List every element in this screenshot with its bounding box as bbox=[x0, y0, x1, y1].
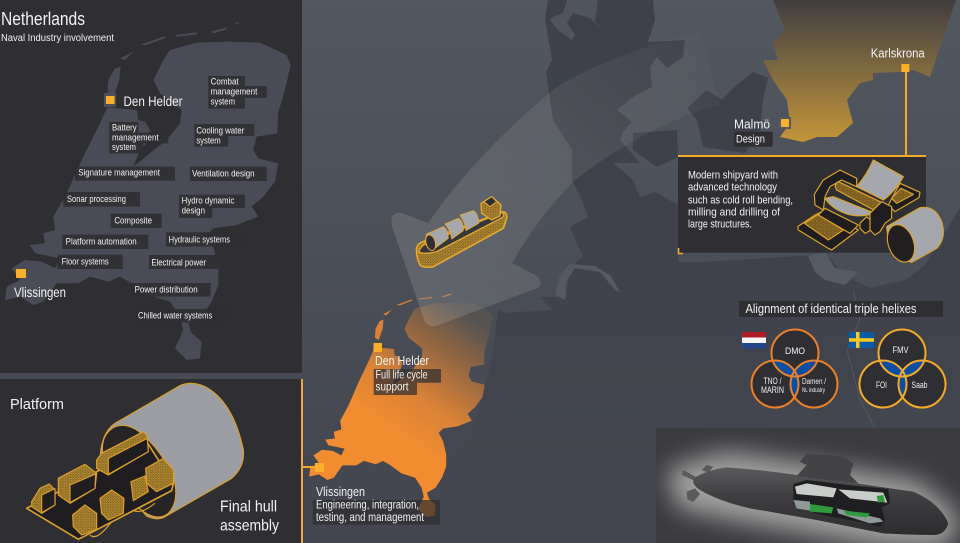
tag: Composite: Composite bbox=[114, 216, 152, 226]
tag: Composite bbox=[111, 214, 162, 228]
tag: Platform automation bbox=[62, 235, 148, 249]
tag: Battery management system: management bbox=[112, 132, 159, 142]
label: Malmo design: Design bbox=[736, 133, 765, 145]
text: shipyard description: such as cold roll bending, bbox=[688, 194, 793, 206]
label: Den Helder: Den Helder bbox=[124, 94, 183, 109]
text: shipyard description: Modern shipyard with bbox=[688, 169, 778, 181]
caption: Final hull assembly: Final hull bbox=[220, 498, 277, 516]
icon: cold roll bending machine and hull ring bbox=[798, 160, 943, 266]
interior compartments bbox=[795, 483, 887, 503]
tag: Ventilation design: Ventilation design bbox=[192, 169, 255, 179]
chart: Swedish triple helix venn diagram: FOI bbox=[876, 380, 887, 390]
tag: Hydro dynamic design: Hydro dynamic bbox=[182, 195, 235, 205]
tag: Combat management system: management bbox=[211, 86, 258, 96]
label: Karlskrona: Karlskrona bbox=[871, 45, 925, 60]
tag: Electrical power bbox=[149, 255, 218, 269]
tag: Platform automation: Platform automation bbox=[66, 236, 137, 246]
chart: Dutch triple helix venn diagram bbox=[752, 330, 838, 408]
label: Vlissingen engineering: Vlissingen bbox=[316, 484, 365, 499]
chart: Swedish triple helix venn diagram: FMV bbox=[892, 345, 908, 355]
map: Limfjord inlets bbox=[550, 0, 607, 40]
chart: Dutch triple helix venn diagram: NL industry bbox=[802, 388, 825, 394]
illustration: submarine cutaway bbox=[656, 428, 960, 543]
caption: Final hull assembly: assembly bbox=[220, 518, 279, 534]
panel: Platform final hull assembly bbox=[0, 379, 302, 543]
heading: Platform: Platform bbox=[10, 396, 64, 413]
label: Den Helder full life cycle support: support bbox=[376, 382, 409, 394]
tag: Battery management system: Battery bbox=[112, 122, 137, 132]
chart: Dutch triple helix venn diagram: DMO bbox=[785, 346, 805, 356]
tag: Battery management system: system bbox=[112, 142, 136, 152]
tag: Chilled water systems: Chilled water systems bbox=[138, 311, 213, 321]
map: border line east bbox=[847, 290, 875, 428]
submarine hull bbox=[693, 467, 948, 535]
tag: Floor systems bbox=[57, 255, 123, 269]
cutaway interior bbox=[793, 480, 890, 527]
icon: hull section with platform modules bbox=[27, 383, 243, 539]
tag: Combat management system: system bbox=[211, 97, 235, 107]
tag: Cooling water system bbox=[194, 124, 254, 147]
chart: Swedish triple helix venn diagram: Saab bbox=[912, 380, 928, 390]
map: Funen island bbox=[633, 130, 678, 167]
label: Den Helder full life cycle support: Den Helder bbox=[375, 353, 430, 368]
tag: Floor systems: Floor systems bbox=[62, 257, 109, 267]
tag: Sonar processing bbox=[63, 192, 140, 207]
label: Vlissingen engineering: testing, and management bbox=[316, 512, 425, 524]
tag: Battery management system bbox=[109, 122, 168, 153]
label: Malmo design bbox=[734, 116, 773, 147]
submarine fins bbox=[682, 465, 713, 502]
tag: Ventilation design bbox=[190, 167, 267, 181]
tag: Electrical power: Electrical power bbox=[151, 257, 206, 267]
tag: Combat management system: Combat bbox=[211, 76, 239, 86]
tag: Sonar processing: Sonar processing bbox=[67, 194, 126, 204]
marker: Den Helder bbox=[104, 93, 116, 107]
label: Den Helder full life cycle support bbox=[374, 353, 441, 395]
industry tags bbox=[57, 76, 267, 323]
map: Germany, Jutland and Poland land bbox=[440, 0, 960, 543]
text: shipyard description: large structures. bbox=[688, 219, 752, 231]
text: shipyard description: milling and drilling of bbox=[688, 207, 780, 219]
map: Netherlands grey silhouette bbox=[5, 22, 291, 360]
heading: Netherlands: Netherlands bbox=[1, 9, 85, 29]
tag: Hydro dynamic design: design bbox=[182, 205, 205, 215]
label: Den Helder full life cycle support: Full life cycle bbox=[376, 369, 428, 381]
tag: Signature management: Signature management bbox=[78, 168, 160, 178]
tag: Power distribution: Power distribution bbox=[135, 284, 198, 294]
tag: Chilled water systems bbox=[136, 309, 229, 323]
tag: Power distribution bbox=[132, 283, 211, 297]
chart: Dutch triple helix venn diagram: Damen / bbox=[802, 377, 827, 386]
tag: Signature management bbox=[75, 167, 175, 181]
map: Sweden highlighted bbox=[763, 0, 956, 142]
marker: Malmo bbox=[779, 117, 791, 129]
chart: Dutch triple helix venn diagram: MARIN bbox=[761, 385, 784, 395]
tag: Hydraulic systems bbox=[166, 232, 243, 247]
heading: alignment of triple helixes: Alignment of identical triple helixes bbox=[746, 302, 916, 316]
label: Vlissingen engineering: Engineering, integration, bbox=[316, 500, 419, 512]
map: Netherlands highlighted in orange bbox=[309, 293, 493, 517]
chart: Dutch triple helix venn diagram: TNO / bbox=[764, 376, 782, 386]
marker: Den Helder on orange map bbox=[374, 343, 382, 352]
connector: Vlissingen to Platform panel bbox=[302, 379, 316, 543]
connector: Karlskrona to shipyard panel bbox=[905, 72, 907, 156]
panel: Netherlands naval industry involvement bbox=[0, 0, 302, 373]
map: Elbe estuary bbox=[555, 264, 630, 300]
map: Zealand island bbox=[687, 72, 768, 153]
label: Vlissingen engineering bbox=[313, 484, 440, 525]
arrow: Sweden to Netherlands transport bbox=[391, 32, 720, 326]
icon: Dutch flag bbox=[742, 332, 766, 348]
tag: Cooling water system: system bbox=[196, 135, 221, 145]
chart: Swedish triple helix venn diagram bbox=[860, 330, 946, 408]
marker: Karlskrona bbox=[901, 64, 909, 72]
icon: Swedish flag bbox=[849, 332, 874, 348]
label: Malmo design: Malmö bbox=[734, 116, 770, 131]
tag: Cooling water system: Cooling water bbox=[196, 125, 244, 135]
marker: Vlissingen on orange map bbox=[315, 463, 324, 472]
label: Vlissingen: Vlissingen bbox=[14, 285, 66, 300]
tag: Hydro dynamic design bbox=[179, 195, 245, 218]
tag: Combat management system bbox=[208, 76, 267, 109]
subheading: Naval Industry involvement bbox=[1, 32, 114, 44]
text: shipyard description: advanced technology bbox=[688, 182, 778, 194]
icon: cargo ship carrying hull sections bbox=[417, 197, 507, 267]
map: Rugen and Baltic coast light shape bbox=[808, 252, 858, 285]
tag: Hydraulic systems: Hydraulic systems bbox=[169, 235, 230, 245]
submarine sail bbox=[797, 453, 858, 483]
marker: Vlissingen bbox=[16, 269, 26, 278]
panel: shipyard technology bbox=[678, 155, 943, 266]
